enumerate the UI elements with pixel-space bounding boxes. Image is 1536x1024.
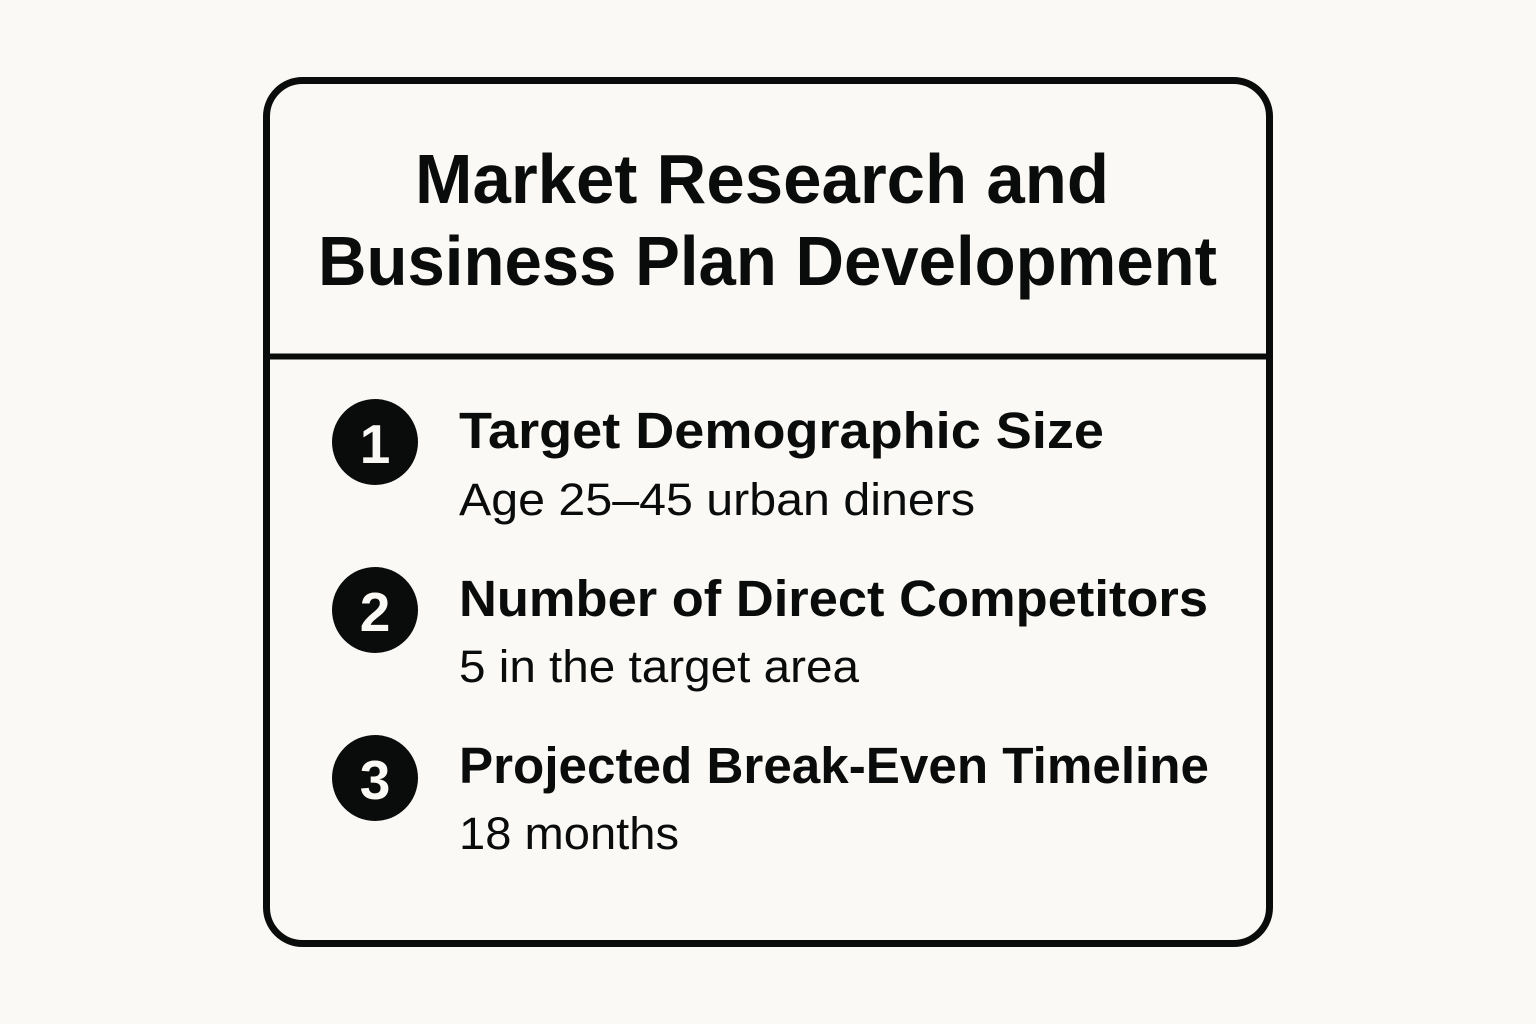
item 2 heading: Number of Direct Competitors [459,570,1208,627]
icon: number 1 badge [332,399,418,485]
icon: number 3 badge: 3 [360,749,390,811]
icon: number 2 badge [332,567,418,653]
icon: number 2 badge: 2 [360,581,390,643]
item 2: number of direct competitors [332,567,1208,692]
title: Market Research and [415,140,1109,218]
item 1 heading: Target Demographic Size [459,402,1104,459]
title: Business Plan Development [318,222,1217,300]
icon: number 1 badge: 1 [360,413,390,475]
item 2 detail: 5 in the target area [459,641,860,692]
item 3 heading: Projected Break-Even Timeline [459,737,1209,794]
item 3: projected break-even timeline [332,735,1209,859]
title [318,140,1217,300]
icon: number 3 badge [332,735,418,821]
panel: market research card [266,80,1270,944]
item 1 detail: Age 25–45 urban diners [459,474,975,525]
item 1: target demographic size [332,399,1104,525]
item 3 detail: 18 months [459,808,679,859]
